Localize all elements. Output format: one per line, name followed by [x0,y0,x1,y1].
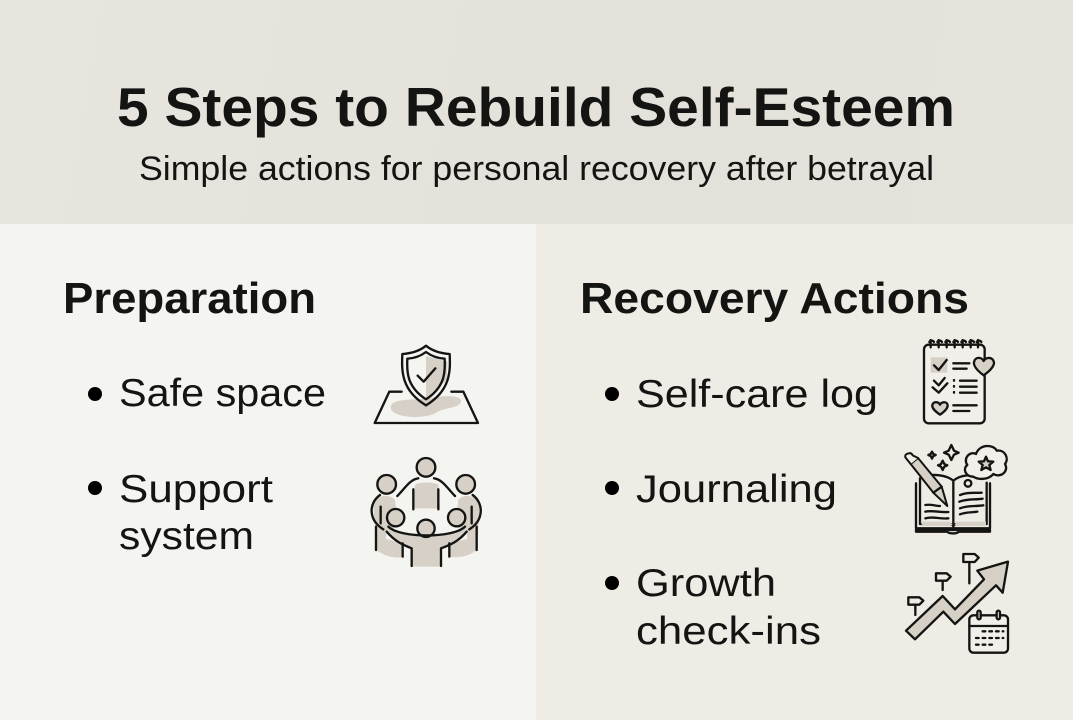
bullet: support system: system [119,515,254,558]
bullet: support system: Support [119,468,273,511]
bullet: support system [88,468,273,558]
subtitle: Simple actions for personal recovery after betrayal [139,150,934,188]
bullet: growth check-ins: check-ins [636,610,821,653]
panel: preparation background [0,224,536,720]
icon: self-care checklist [924,340,994,423]
icon: growth arrow with milestones and calendar [906,554,1008,653]
bullet: self-care log: Self-care log [636,373,878,416]
heading: recovery actions: Recovery Actions [580,274,969,323]
icon: support circle of people [372,458,481,567]
heading: preparation: Preparation [63,274,316,323]
bullet: growth check-ins [605,562,821,653]
title: 5 Steps to Rebuild Self-Esteem [117,76,955,138]
bullet: safe space: Safe space [119,372,326,415]
panel: recovery actions background [536,224,1073,720]
panel: recovery actions [580,274,1008,653]
icon: journal with pen and thought cloud [905,445,1007,533]
icon: shield on map [375,346,478,423]
bullet: growth check-ins: Growth [636,562,776,605]
bullet: journaling: Journaling [636,468,837,511]
panel: preparation [63,274,1008,653]
header band [0,0,1073,224]
